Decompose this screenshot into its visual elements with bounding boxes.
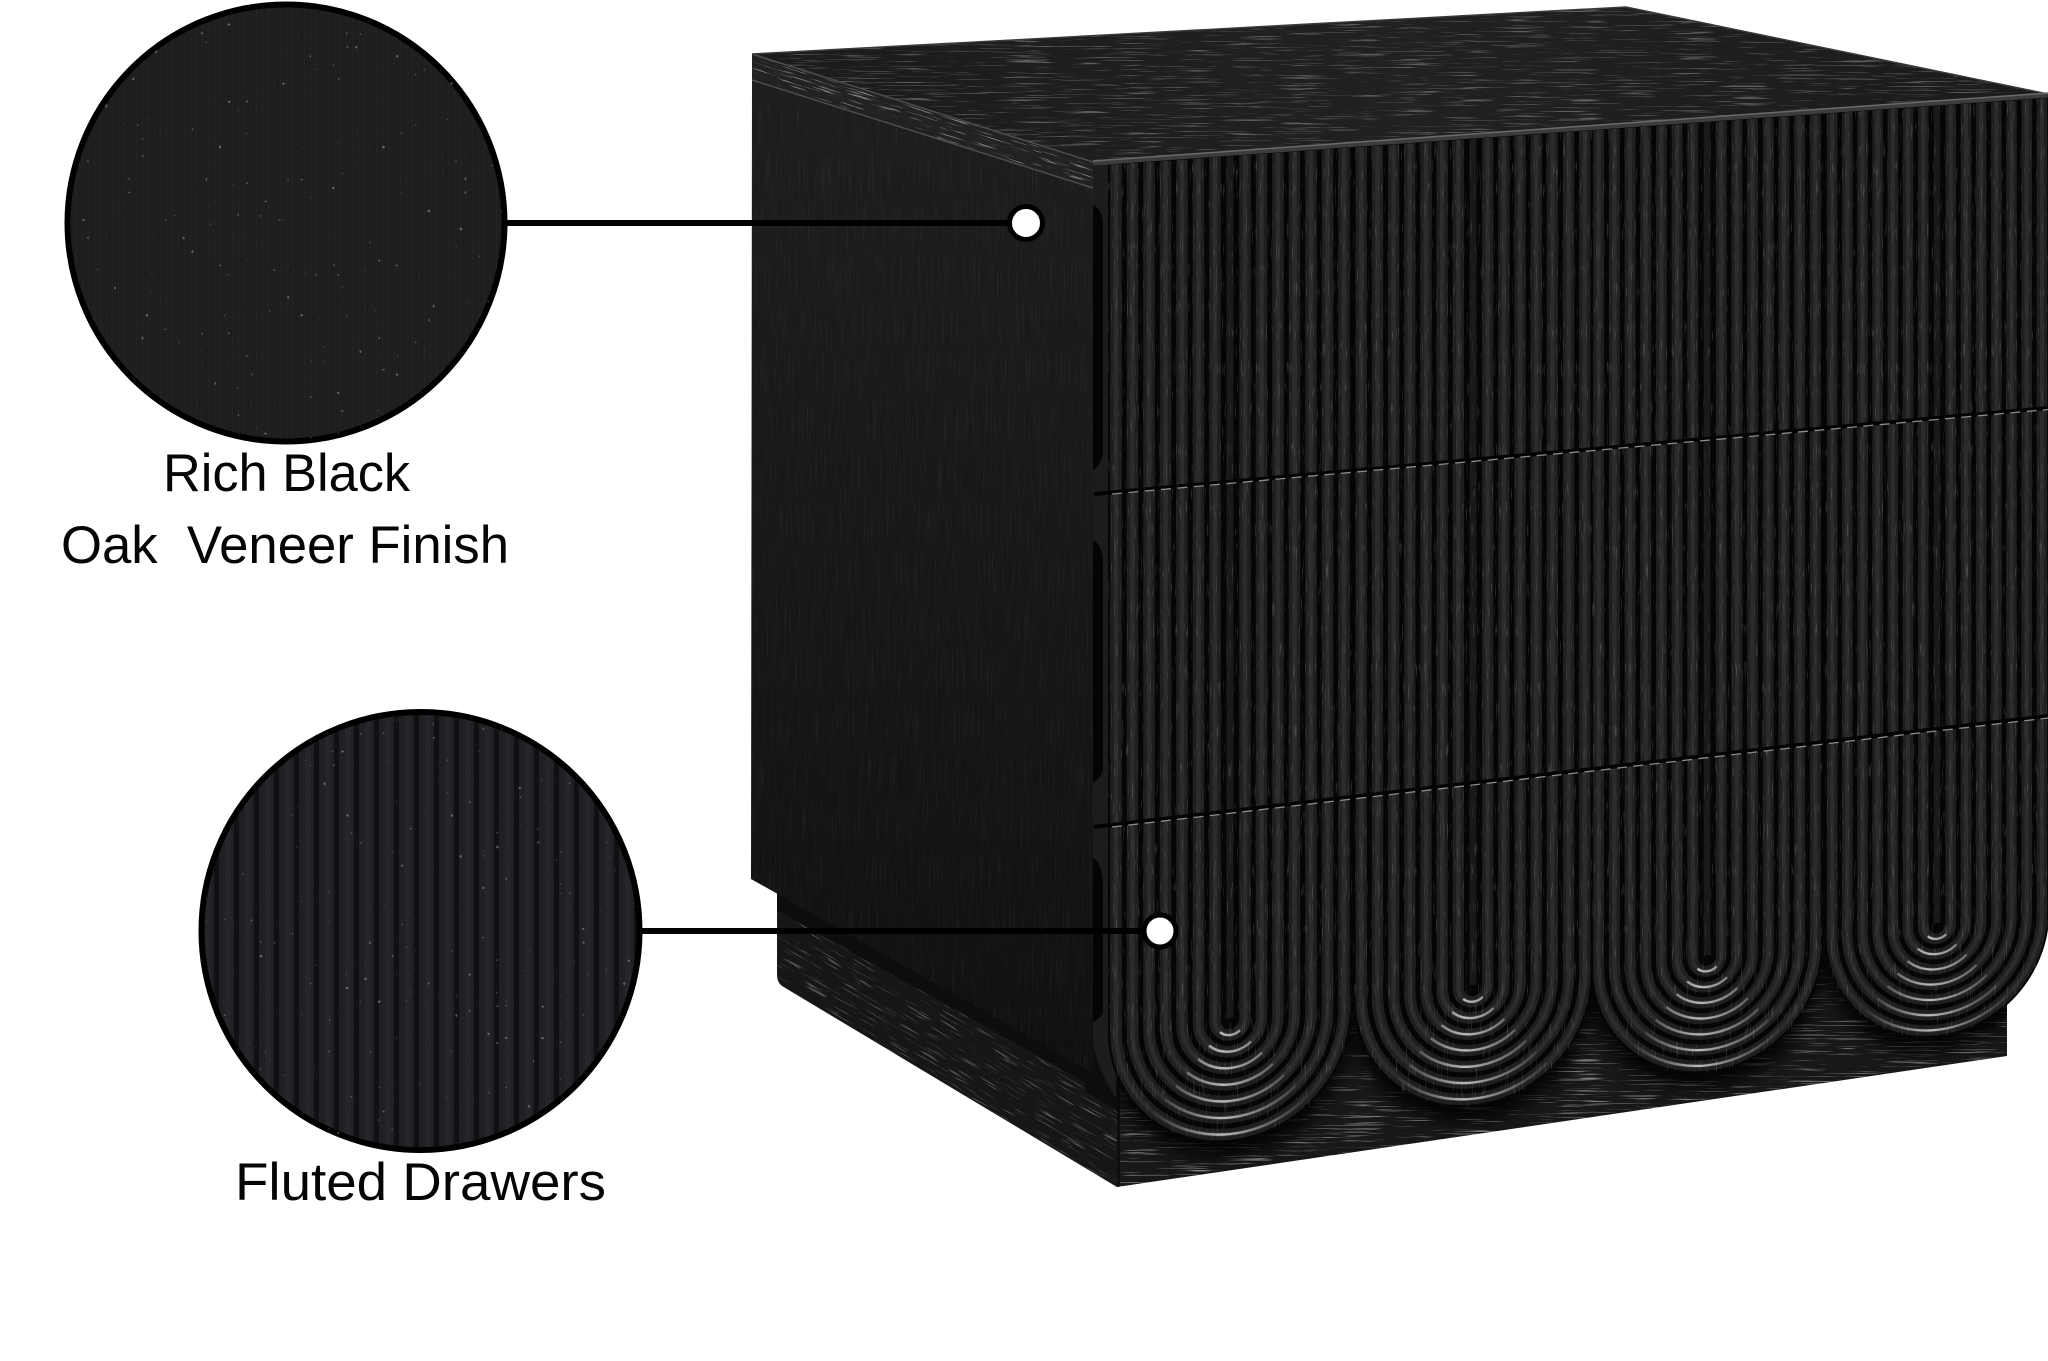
finger pull notches	[1093, 205, 1103, 1022]
drawer seam 2	[1094, 716, 2048, 827]
plinth base: front face	[1117, 934, 2007, 1187]
label: rich black oak veneer finish: Oak Veneer Finish	[61, 516, 509, 575]
callout leader: fluted drawers	[640, 915, 1176, 947]
plinth corner filler	[1085, 1040, 1120, 1112]
top edge of drawer face	[1093, 95, 2048, 163]
arch lobe 3	[1593, 114, 1823, 1073]
arch lobe 4	[1825, 98, 2048, 1036]
arch lobe 2	[1354, 130, 1590, 1105]
label: fluted drawers: Fluted Drawers	[235, 1153, 606, 1212]
label: rich black oak veneer finish	[61, 444, 509, 575]
lobe shadows on plinth	[1117, 934, 2007, 1168]
side panel	[745, 70, 1095, 1080]
drawer front base	[1100, 96, 2048, 1030]
plinth base: left face	[777, 894, 1117, 1187]
drawer front left rim	[1093, 162, 1116, 1098]
top surface	[756, 8, 2040, 162]
nightstand product illustration	[605, 0, 2048, 1331]
flute wood grain	[1100, 90, 2048, 1150]
fluted drawer fronts with arches	[1108, 0, 2048, 1154]
callout leader: veneer	[506, 206, 1042, 240]
label: rich black oak veneer finish: Rich Black	[163, 444, 411, 503]
drawer seam 1	[1094, 408, 2048, 494]
arch lobe 1	[1108, 148, 1352, 1140]
swatch: rich black oak veneer	[65, 2, 507, 444]
side top edge band	[752, 54, 1093, 188]
swatch: fluted drawers	[199, 710, 642, 1153]
